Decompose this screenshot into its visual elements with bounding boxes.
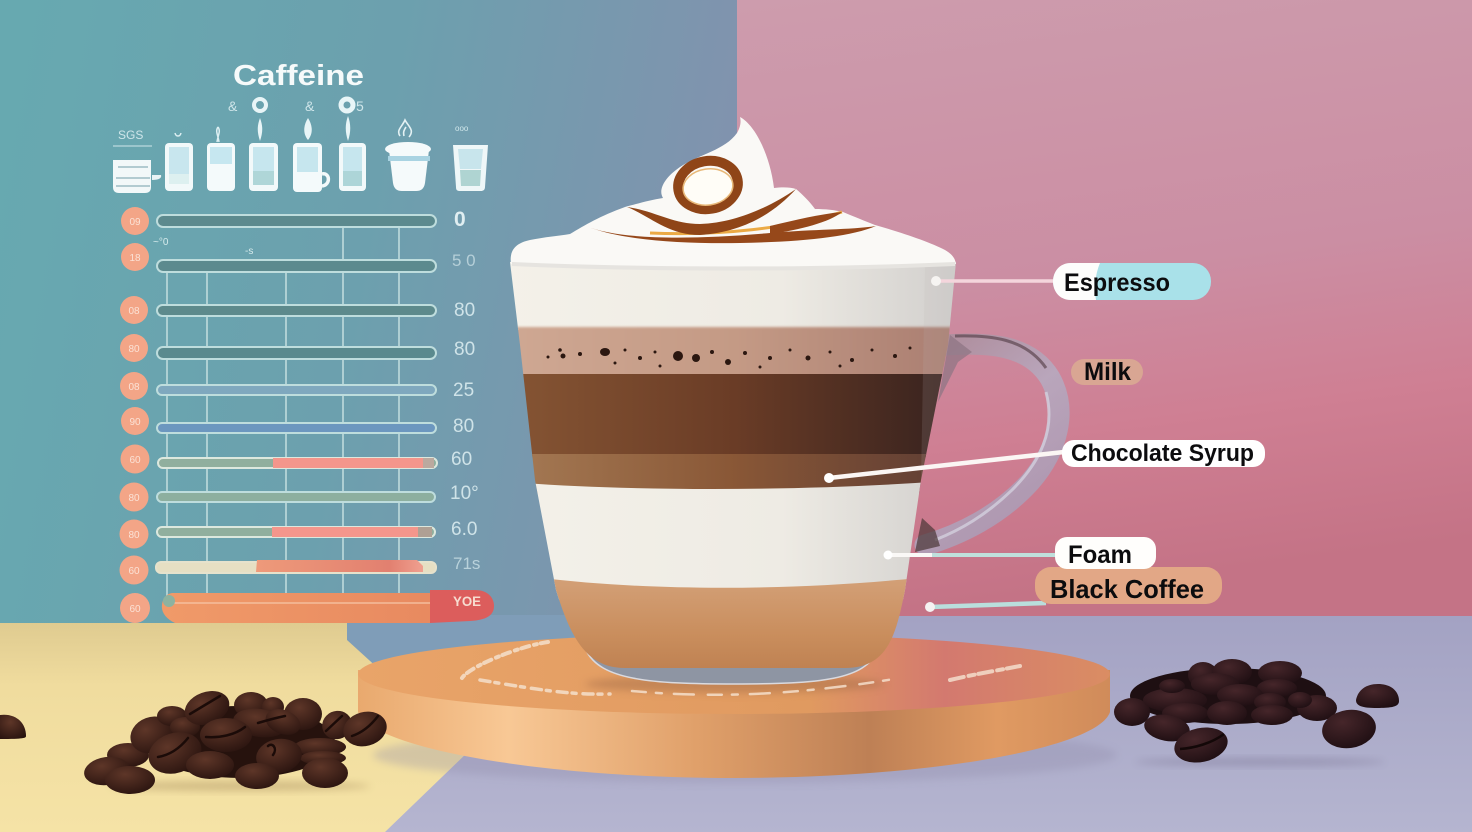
row bar 2 — [157, 260, 436, 272]
cap label: YOE — [453, 593, 481, 609]
icon tiny labels: & — [305, 98, 315, 114]
bean pile right — [1114, 659, 1399, 767]
glass edge shading — [921, 329, 950, 478]
background: blue floor patch — [347, 615, 640, 670]
label: espresso — [1053, 263, 1211, 300]
coaster disk — [358, 634, 1117, 783]
badge labels: 80 — [128, 344, 140, 355]
bar chart rows — [156, 215, 494, 623]
badge labels: 08 — [128, 382, 140, 393]
disk side — [358, 670, 1110, 778]
grid lines — [167, 225, 399, 596]
cup base glass — [586, 650, 878, 684]
label: milk — [1071, 358, 1143, 386]
bean creases — [158, 696, 378, 757]
whipped topping — [511, 117, 956, 268]
speckles — [546, 346, 912, 368]
row bar 5 — [157, 385, 436, 395]
label: foam — [1055, 537, 1156, 569]
badge labels: 90 — [129, 417, 141, 428]
chart values: 6.0 — [451, 519, 477, 540]
bean crease right — [1180, 734, 1224, 749]
chart values: 25 — [453, 380, 474, 401]
row bar 4 — [157, 347, 436, 359]
stray chart marks: -s — [245, 246, 253, 257]
chart values: 80 — [454, 300, 475, 321]
row bar 11 with cap — [162, 590, 494, 623]
coffee cup — [500, 117, 970, 690]
background: lavender floor — [348, 616, 1472, 832]
background: teal slate panel — [0, 0, 737, 626]
coffee beans: right pile — [1114, 659, 1399, 767]
callout lines — [824, 276, 1064, 612]
line: black coffee — [925, 602, 1046, 612]
cup layers — [510, 262, 956, 668]
chart values: 71s — [453, 554, 480, 573]
topping shadow — [512, 262, 955, 270]
row bar 8 — [157, 492, 435, 502]
coffee beans: left pile — [0, 685, 391, 794]
row bar 1 — [157, 215, 436, 227]
icon: bowl cup — [385, 142, 431, 191]
disk top — [358, 634, 1110, 714]
icon: mug — [293, 143, 328, 192]
icon: glass 2 — [207, 143, 235, 191]
layer: speckled foam — [500, 327, 970, 378]
disk lettering — [462, 642, 1020, 695]
beans shadow right — [1135, 758, 1385, 766]
disk shadow — [373, 727, 1117, 783]
icon: tumbler — [453, 145, 488, 191]
stray chart marks — [153, 237, 253, 257]
background: pink panel — [737, 0, 1472, 618]
chart values: 10° — [450, 483, 479, 504]
label: chocolate syrup: Chocolate Syrup — [1071, 440, 1254, 467]
chart values: 5 0 — [452, 251, 476, 270]
badge labels: 08 — [128, 306, 140, 317]
row bar 7 — [158, 458, 437, 468]
line: espresso — [931, 276, 1056, 286]
title: Caffeine — [233, 60, 364, 92]
chart values: 80 — [454, 339, 475, 360]
badge labels — [128, 217, 141, 615]
chocolate swirl — [586, 156, 876, 243]
badge labels: 60 — [128, 566, 140, 577]
cup contact shadow — [585, 675, 885, 693]
label: espresso: Espresso — [1064, 269, 1170, 297]
badge labels: 80 — [128, 530, 140, 541]
row bar 10 — [156, 560, 436, 573]
layer: white milk top — [510, 262, 956, 330]
label: milk: Milk — [1084, 358, 1131, 386]
row bar 6 — [157, 423, 436, 433]
icon tiny labels: SGS — [118, 128, 143, 142]
icon: stacked cup — [113, 160, 161, 193]
icon tiny labels — [113, 98, 469, 146]
badge labels: 09 — [129, 217, 141, 228]
stray chart marks: ~°0 — [153, 237, 169, 248]
icon tiny labels: & — [228, 98, 238, 114]
icon: drops and steam — [175, 99, 411, 142]
badge labels: 80 — [128, 493, 140, 504]
line: chocolate syrup — [824, 452, 1064, 483]
label: black coffee: Black Coffee — [1050, 574, 1204, 604]
layer: chocolate — [532, 454, 926, 494]
row badges — [120, 207, 150, 623]
caffeine chart panel — [113, 60, 494, 623]
beans shadow — [110, 781, 370, 791]
bean pile — [82, 685, 391, 794]
line: foam — [884, 550, 1058, 560]
badge labels: 60 — [129, 604, 141, 615]
badge labels: 18 — [129, 253, 141, 264]
icon tiny labels: ooo — [455, 124, 469, 133]
icon row: drinks — [113, 98, 488, 193]
layer: white foam band — [536, 482, 921, 600]
single bean far left — [0, 715, 26, 739]
background: yellow floor — [0, 623, 470, 832]
chart values: 80 — [453, 416, 474, 437]
glass handle — [915, 335, 1059, 552]
chart values: 0 — [454, 208, 466, 231]
labels — [1035, 263, 1265, 604]
chart values: 60 — [451, 449, 472, 470]
row bar 9 — [157, 527, 435, 537]
label: foam: Foam — [1068, 541, 1132, 569]
icon tiny labels: 5 — [356, 98, 364, 114]
chart values — [450, 208, 480, 573]
badge labels: 60 — [129, 455, 141, 466]
label: black coffee — [1035, 567, 1222, 604]
icon: glass 1 — [165, 143, 193, 191]
icon: glass 4 — [339, 143, 366, 191]
layer: tan base — [554, 579, 906, 668]
row bar 3 — [157, 305, 436, 316]
swirl center — [681, 166, 735, 208]
layer: dark espresso — [523, 374, 942, 458]
icon: glass 3 — [249, 143, 278, 191]
